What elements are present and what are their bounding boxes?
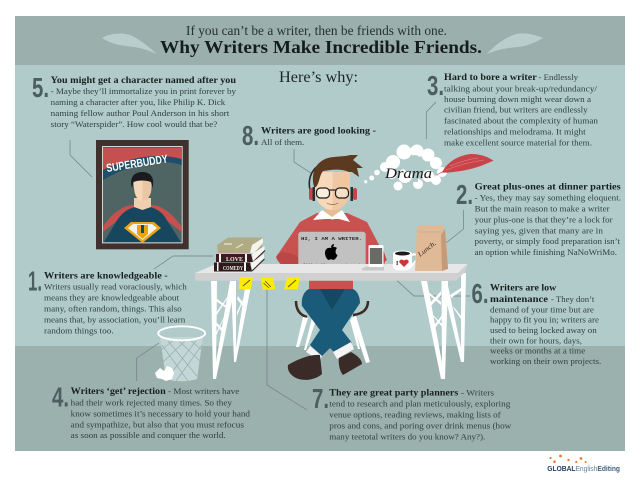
text 6: used to being locked away on	[490, 325, 597, 335]
logo dots	[549, 455, 587, 463]
text 2: an option while finishing NaNoWriMo.	[475, 247, 617, 257]
text 5: naming a character after you, like Philip K. Dick	[51, 97, 226, 107]
poster title: SUPERBUDDY	[106, 153, 169, 175]
numeral 1: 1.	[28, 266, 42, 297]
text 2: But the main reason to make a writer	[475, 203, 610, 213]
neck and collar	[313, 203, 350, 222]
icon: red quill	[433, 154, 494, 177]
text 4: know sometimes it’s necessary to hold your hand	[71, 408, 251, 418]
lunch bag	[415, 225, 448, 271]
bag label: Lunch.	[415, 239, 438, 259]
text 6: maintenance	[490, 294, 548, 304]
books	[214, 238, 265, 272]
drama text: Drama	[384, 166, 432, 182]
text 4	[71, 386, 251, 440]
laptop: I’ll tell you a story:)	[303, 263, 361, 268]
text 2: - Yes, they may say something eloquent.	[475, 192, 621, 202]
head	[316, 172, 350, 210]
connector lines	[70, 102, 470, 410]
text 3: civilian friend, but writers are endlessly	[444, 105, 588, 115]
icon: right feather	[487, 33, 543, 54]
numeral 5: 5.	[32, 72, 49, 103]
text 7	[329, 388, 512, 441]
title: If you can’t be a writer, then be friends with one.	[186, 24, 447, 39]
text 3: make excellent source material for them.	[444, 137, 592, 147]
desk	[195, 264, 468, 281]
laptop text: HI, I AM A WRITER.	[301, 236, 362, 242]
text 2: your plus-one is that they’re a lock for	[475, 214, 613, 224]
item 7	[312, 383, 512, 441]
top book	[217, 238, 264, 253]
glasses	[316, 188, 348, 198]
text 1: means they are knowledgeable about	[44, 293, 180, 303]
text 7: venue options, reading reviews, making lists of	[329, 410, 501, 420]
text 1: Writers usually read voraciously, which	[44, 282, 187, 292]
item 8	[242, 120, 376, 151]
text 3: - Endlessly	[538, 72, 579, 82]
text 2	[475, 181, 621, 257]
title: Why Writers Make Incredible Friends.	[160, 37, 482, 57]
left desk leg	[211, 281, 252, 379]
superbuddy poster	[96, 140, 189, 249]
text 3: relationships and melodrama. It might	[444, 127, 586, 137]
title	[160, 24, 482, 57]
phone on dock	[362, 245, 386, 270]
icon: left feather	[102, 34, 157, 54]
chair	[296, 301, 370, 363]
text 6: weeks or months at a time	[490, 346, 585, 356]
logo wordmark: GLOBALEnglishEditing	[547, 464, 620, 473]
text 6: their own for hours, days,	[490, 335, 582, 345]
text 8: Writers are good looking -	[261, 126, 376, 136]
text 6: Writers are low	[490, 283, 557, 293]
text 7: many teetotal writers do you know? Any?).	[329, 431, 485, 441]
item 2	[456, 179, 621, 257]
text 6: - They don’t	[551, 294, 595, 304]
text 1: random things too.	[44, 325, 114, 335]
cuffs	[306, 342, 354, 361]
text 7: tend to research and plan meticulously, exploring	[329, 399, 511, 409]
icon: apple logo	[325, 244, 338, 260]
item 4	[52, 382, 251, 440]
text 2: poverty, or simply food preparation isn’t	[475, 236, 621, 246]
text 3: fascinated about the complexity of human	[444, 116, 599, 126]
text 8	[261, 126, 376, 147]
item 3	[427, 70, 599, 147]
hair	[313, 155, 363, 187]
text 4: - Most writers have	[168, 386, 239, 396]
text 3	[444, 72, 599, 147]
heading: here's why: Here’s why:	[279, 69, 358, 86]
text 8: All of them.	[261, 137, 304, 147]
text 4: and sympathize, but also that you must refocus	[71, 419, 245, 429]
chair and desk legs	[211, 273, 466, 379]
text 3: Hard to bore a writer	[444, 72, 537, 82]
text 3: house burning down might wear down a	[444, 94, 591, 104]
text 3: talking about your break-up/redundancy/	[444, 83, 598, 93]
text 5: story “Waterspider”. How cool would that be?	[51, 119, 217, 129]
text 6: demand of your time but are	[490, 304, 594, 314]
love book: LOVE	[226, 256, 243, 263]
text 1: many, often random, things. This also	[44, 304, 182, 314]
trousers	[302, 289, 360, 356]
text 2: saying yes, given that many are in	[475, 225, 604, 235]
numeral 7: 7.	[312, 383, 329, 414]
numeral 6: 6.	[472, 278, 488, 309]
numeral 8: 8.	[242, 120, 259, 151]
sticky notes	[239, 277, 300, 290]
text 6	[490, 283, 601, 366]
thought cloud	[364, 144, 447, 190]
text 7: - Writers	[461, 388, 495, 398]
text 6: working on their own projects.	[490, 356, 601, 366]
right desk leg	[421, 273, 466, 379]
superhero	[103, 172, 182, 243]
shoes	[288, 352, 362, 380]
coffee mug: I	[396, 261, 399, 267]
text 6: happy to fit you in; writers are	[490, 315, 599, 325]
text 5	[51, 75, 237, 129]
text 7: pros and cons, and poring over drink menus (how	[329, 421, 512, 431]
headphones	[309, 163, 357, 201]
text 1: Writers are knowledgeable -	[44, 270, 168, 280]
numeral 3: 3.	[427, 70, 444, 101]
text 5: You might get a character named after you	[51, 75, 236, 85]
coffee mug	[393, 250, 417, 270]
wastebasket	[155, 326, 205, 381]
writer character	[276, 155, 387, 380]
comedy book: COMEDY	[223, 265, 243, 272]
text 4: as soon as possible and conquer the world.	[71, 430, 226, 440]
numeral 4: 4.	[52, 382, 69, 413]
text 1: means that, by association, you’ll learn	[44, 315, 186, 325]
item 6	[472, 278, 601, 366]
text 5: naming fellow author Poul Anderson in his short	[51, 108, 230, 118]
text 5: - Maybe they’ll immortalize you in print forever by	[51, 86, 237, 96]
text 1	[44, 270, 187, 335]
text 4: Writers ‘get’ rejection	[71, 386, 166, 396]
item 5	[32, 72, 237, 129]
laptop	[298, 232, 366, 271]
numeral 2: 2.	[456, 179, 473, 210]
logo	[547, 455, 620, 473]
crumpled paper	[155, 366, 174, 381]
item 1	[28, 266, 187, 335]
sweater	[276, 213, 387, 289]
text 2: Great plus-ones at dinner parties	[475, 181, 621, 191]
text 4: had their work rejected many times. So they	[71, 397, 233, 407]
text 7: They are great party planners	[329, 388, 459, 398]
